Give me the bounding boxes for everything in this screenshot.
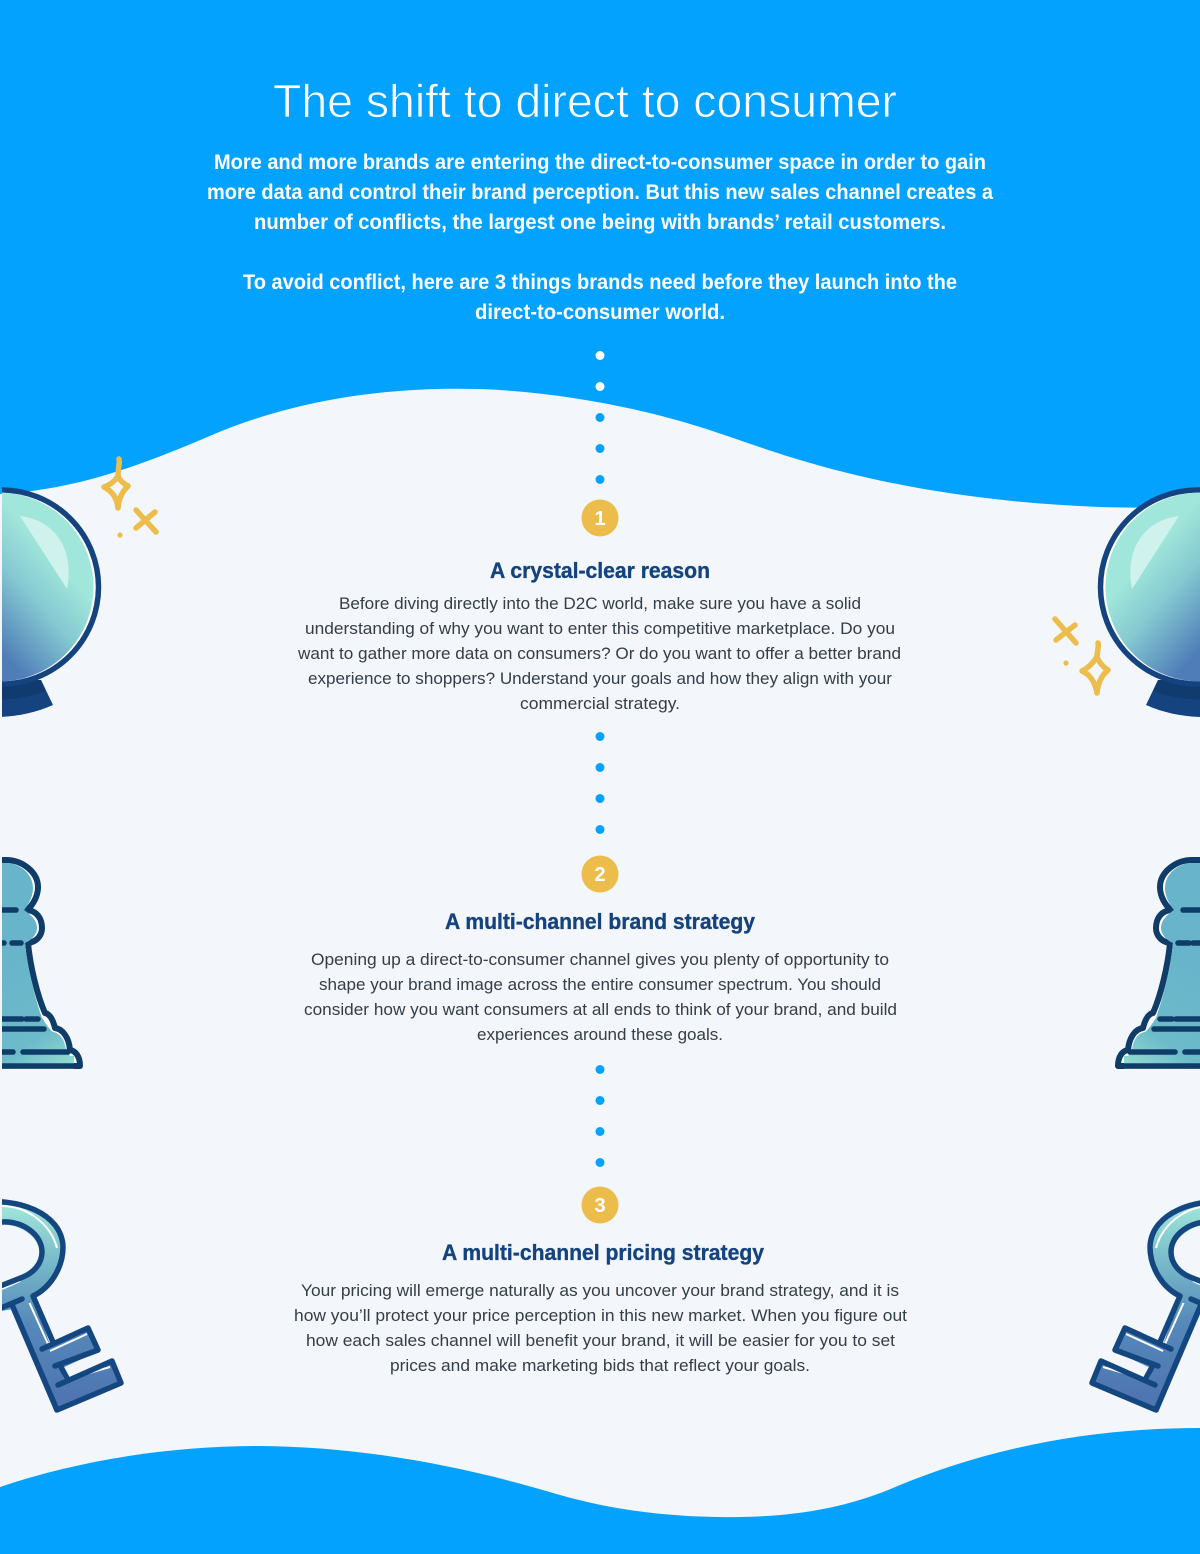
intro text block	[207, 150, 994, 324]
intro text block: more data and control their brand perception. But this new sales channel creates a	[207, 180, 994, 204]
icon: key left	[0, 1202, 121, 1412]
step 1 number badge: 1	[594, 508, 606, 530]
step 2 body text	[304, 950, 897, 1044]
icon: sparkles right	[1055, 619, 1108, 693]
step 3 body text	[294, 1281, 907, 1375]
step 1 number badge	[582, 500, 618, 536]
icon: chess pawn right	[1118, 860, 1200, 1069]
intro text block: number of conflicts, the largest one being with brands’ retail customers.	[254, 210, 946, 234]
dotted connector: step 2 to step 3	[596, 1065, 604, 1167]
icon: crystal ball left	[0, 490, 98, 717]
dotted connector: intro to step 1	[596, 351, 604, 484]
step 2 heading: A multi-channel brand strategy	[445, 909, 756, 934]
step 2 body text: shape your brand image across the entire consumer spectrum. You should	[319, 975, 881, 994]
step 1 heading: A crystal-clear reason	[490, 558, 710, 583]
icon: key right	[1092, 1202, 1200, 1412]
step 1 body text: understanding of why you want to enter this competitive marketplace. Do you	[305, 619, 895, 638]
step 3 body text: how you’ll protect your price perception in this new market. When you figure out	[294, 1306, 907, 1325]
step 1 body text: want to gather more data on consumers? Or do you want to offer a better brand	[297, 644, 901, 663]
step 2 body text: Opening up a direct-to-consumer channel gives you plenty of opportunity to	[311, 950, 889, 969]
step 2 body text: consider how you want consumers at all ends to think of your brand, and build	[304, 1000, 897, 1019]
step 3 body text: Your pricing will emerge naturally as you uncover your brand strategy, and it is	[301, 1281, 899, 1300]
step 1 body text: commercial strategy.	[520, 694, 680, 713]
title: The shift to direct to consumer	[273, 75, 897, 127]
step 2 number badge: 2	[594, 864, 606, 886]
step 3 number badge	[582, 1186, 618, 1224]
step 3 body text: prices and make marketing bids that reflect your goals.	[390, 1356, 810, 1375]
dotted connector: step 1 to step 2	[596, 732, 604, 834]
icon: crystal ball right	[1100, 490, 1200, 717]
step 1 body text: experience to shoppers? Understand your goals and how they align with your	[308, 669, 892, 688]
step 3 heading: A multi-channel pricing strategy	[442, 1240, 765, 1265]
intro text block: To avoid conflict, here are 3 things brands need before they launch into the	[243, 270, 957, 294]
intro text block: More and more brands are entering the direct-to-consumer space in order to gain	[214, 150, 986, 174]
step 2 body text: experiences around these goals.	[477, 1025, 723, 1044]
step 2 number badge	[582, 856, 618, 892]
bottom blue wave footer	[0, 1428, 1200, 1554]
icon: sparkles left	[104, 459, 156, 538]
step 3 body text: how each sales channel will benefit your brand, it will be easier for you to set	[306, 1331, 895, 1350]
step 1 body text: Before diving directly into the D2C world, make sure you have a solid	[339, 594, 861, 613]
top blue wave header	[0, 0, 1200, 508]
step 3 number badge: 3	[594, 1195, 606, 1217]
step 1 body text	[297, 594, 901, 713]
intro text block: direct-to-consumer world.	[475, 300, 725, 324]
icon: chess pawn left	[0, 860, 80, 1069]
